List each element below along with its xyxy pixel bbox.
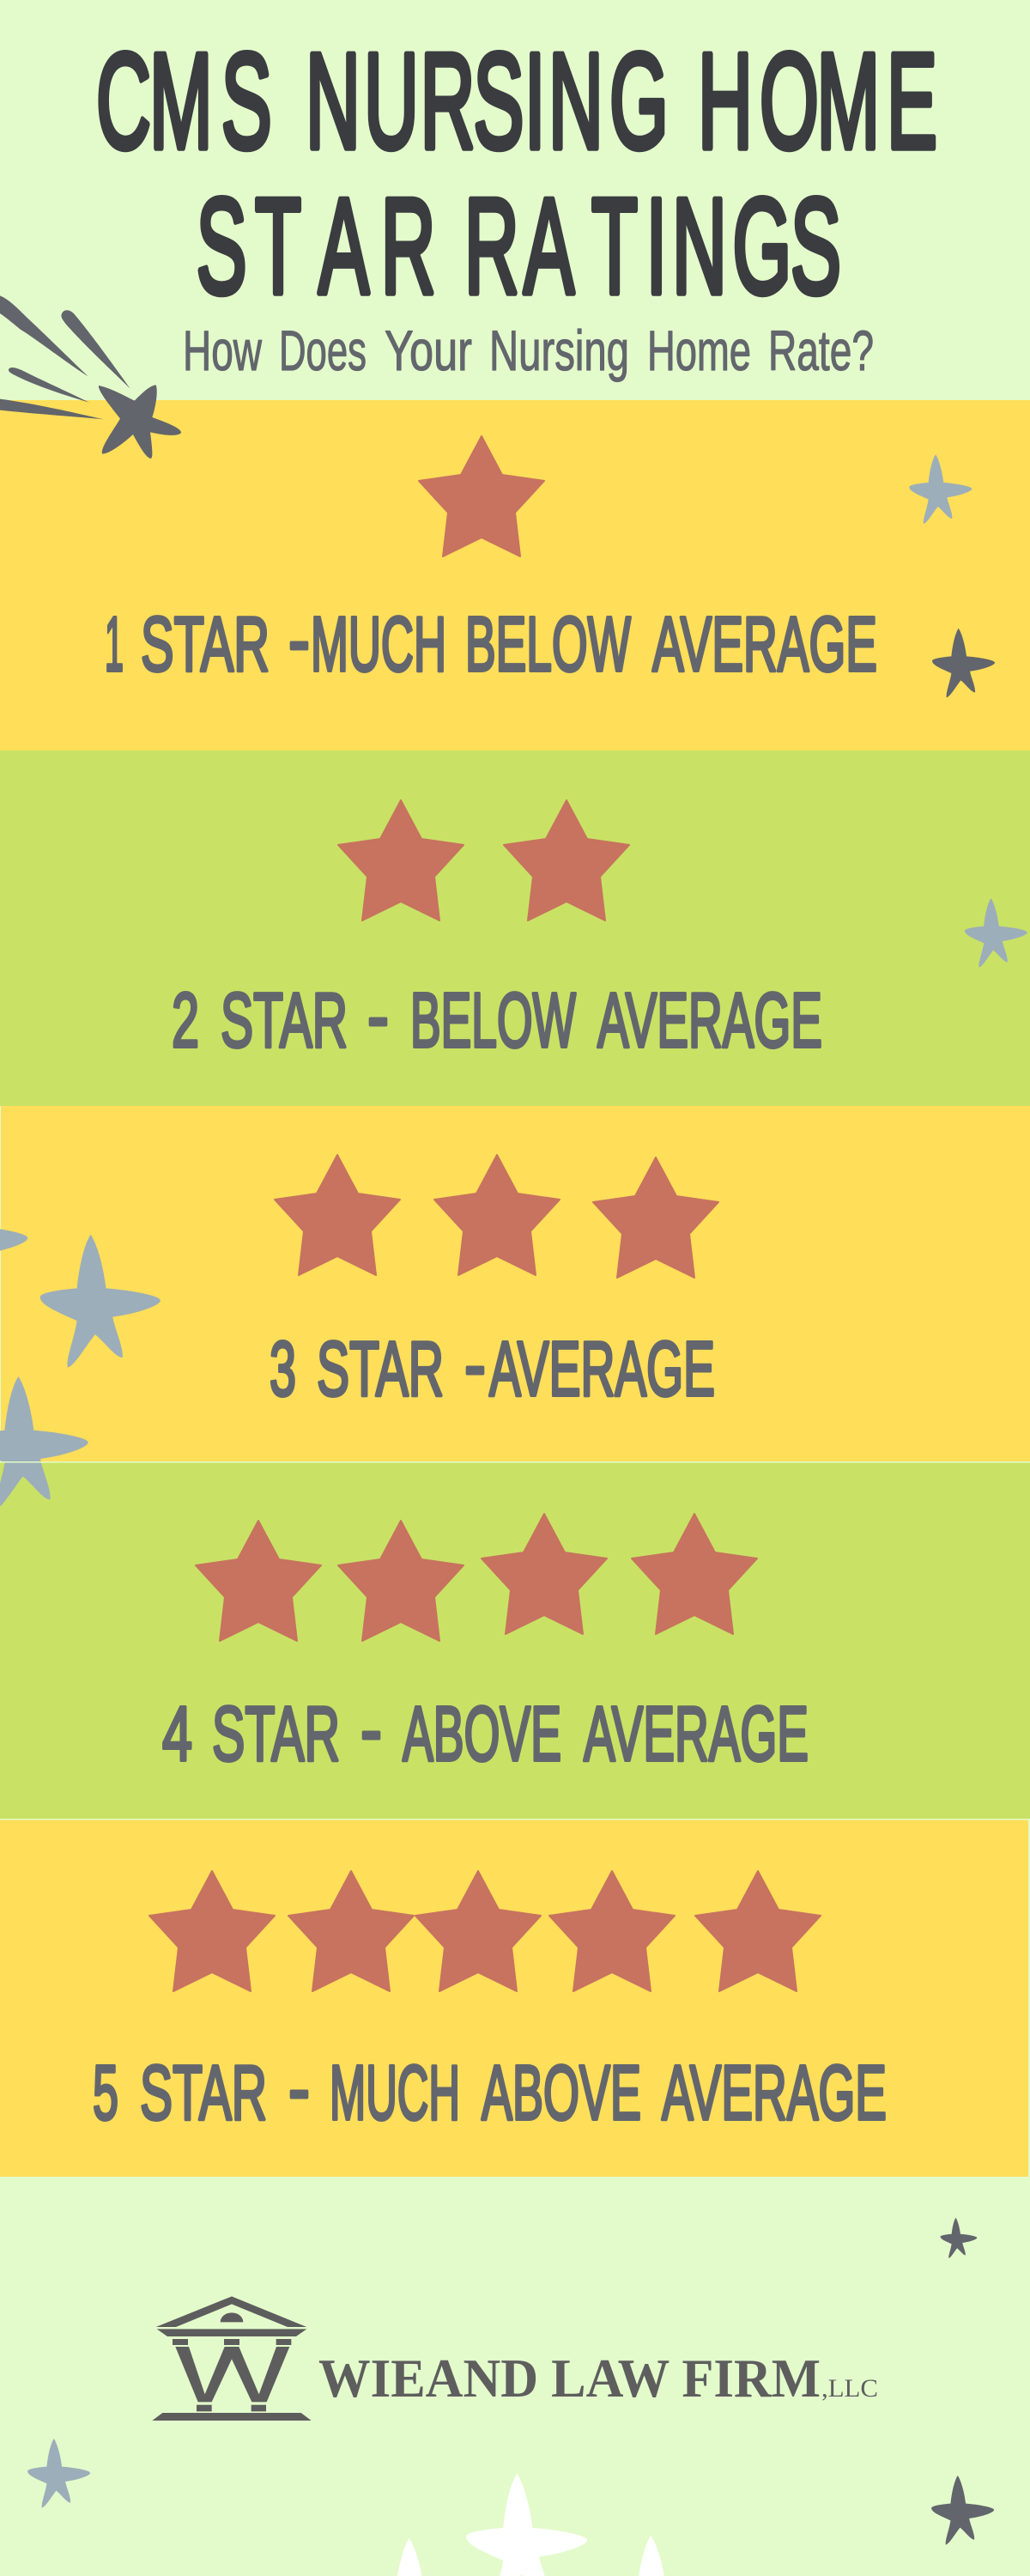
label: 4 star: [162, 1687, 809, 1777]
label: 5 star: STAR: [140, 2050, 267, 2136]
decorative white stars: bottom edge: [358, 2474, 721, 2576]
label: 5 star: 5: [93, 2050, 118, 2136]
icon: shooting star: [0, 295, 181, 459]
label: 1 star: -: [288, 598, 310, 683]
label: 2 star: STAR: [221, 978, 348, 1064]
logo wordmark: ,LLC: [821, 2374, 878, 2403]
subtitle: Nursing: [489, 319, 629, 382]
rating stars: five: [149, 1871, 821, 1991]
label: 5 star: -: [288, 2046, 310, 2132]
logo: Wieand Law Firm: [152, 2296, 878, 2421]
label: 3 star: STAR: [317, 1327, 444, 1413]
subtitle: Home: [647, 319, 751, 382]
band: 3 star: [1, 1106, 1030, 1461]
rating stars: three: [275, 1155, 718, 1278]
band: 4 star: [0, 1462, 1030, 1819]
label: 1 star: STAR: [141, 602, 270, 688]
band: 1 star: [0, 400, 1030, 750]
label: 5 star: ABOVE: [482, 2050, 641, 2136]
decorative stars: right side: [909, 454, 1027, 968]
logo wordmark: WIEAND LAW FIRM: [318, 2348, 821, 2409]
subtitle: Does: [279, 319, 367, 382]
label: 2 star: 2: [172, 978, 199, 1064]
rating stars: four: [196, 1514, 757, 1641]
label: 4 star: 4: [162, 1692, 192, 1777]
label: 1 star: AVERAGE: [652, 602, 877, 688]
label: 4 star: AVERAGE: [584, 1692, 809, 1777]
decorative stars: footer: [27, 2218, 994, 2545]
label: 5 star: AVERAGE: [662, 2050, 887, 2136]
label: 3 star: 3: [270, 1327, 296, 1413]
label: 3 star: [270, 1322, 715, 1413]
label: 5 star: MUCH: [330, 2050, 460, 2136]
label: 2 star: -: [367, 974, 389, 1060]
subtitle: [183, 319, 874, 382]
label: 1 star: 1: [105, 602, 124, 688]
label: 4 star: -: [360, 1687, 382, 1773]
label: 3 star: -: [464, 1322, 486, 1408]
decorative stars: left side: [0, 1172, 161, 1510]
subtitle: Your: [385, 319, 472, 382]
label: 4 star: ABOVE: [403, 1692, 561, 1777]
label: 2 star: [172, 974, 822, 1064]
label: 5 star: [93, 2046, 887, 2136]
icon: column temple W: [152, 2296, 312, 2421]
label: 1 star: [105, 598, 877, 688]
label: 4 star: STAR: [212, 1692, 340, 1777]
subtitle: How: [183, 319, 262, 382]
label: 2 star: BELOW: [410, 978, 576, 1064]
subtitle: Rate?: [768, 319, 874, 382]
band: 5 star: [0, 1820, 1028, 2177]
title: [96, 26, 937, 323]
band: 2 star: [0, 750, 1030, 1106]
title: STAR RATINGS: [197, 171, 841, 323]
label: 2 star: AVERAGE: [597, 978, 822, 1064]
rating stars: one: [419, 436, 544, 556]
rating stars: two: [338, 800, 629, 920]
label: 1 star: MUCH: [311, 602, 446, 688]
title: CMS NURSING HOME: [96, 26, 937, 178]
label: 3 star: AVERAGE: [489, 1327, 715, 1413]
label: 1 star: BELOW: [465, 602, 631, 688]
